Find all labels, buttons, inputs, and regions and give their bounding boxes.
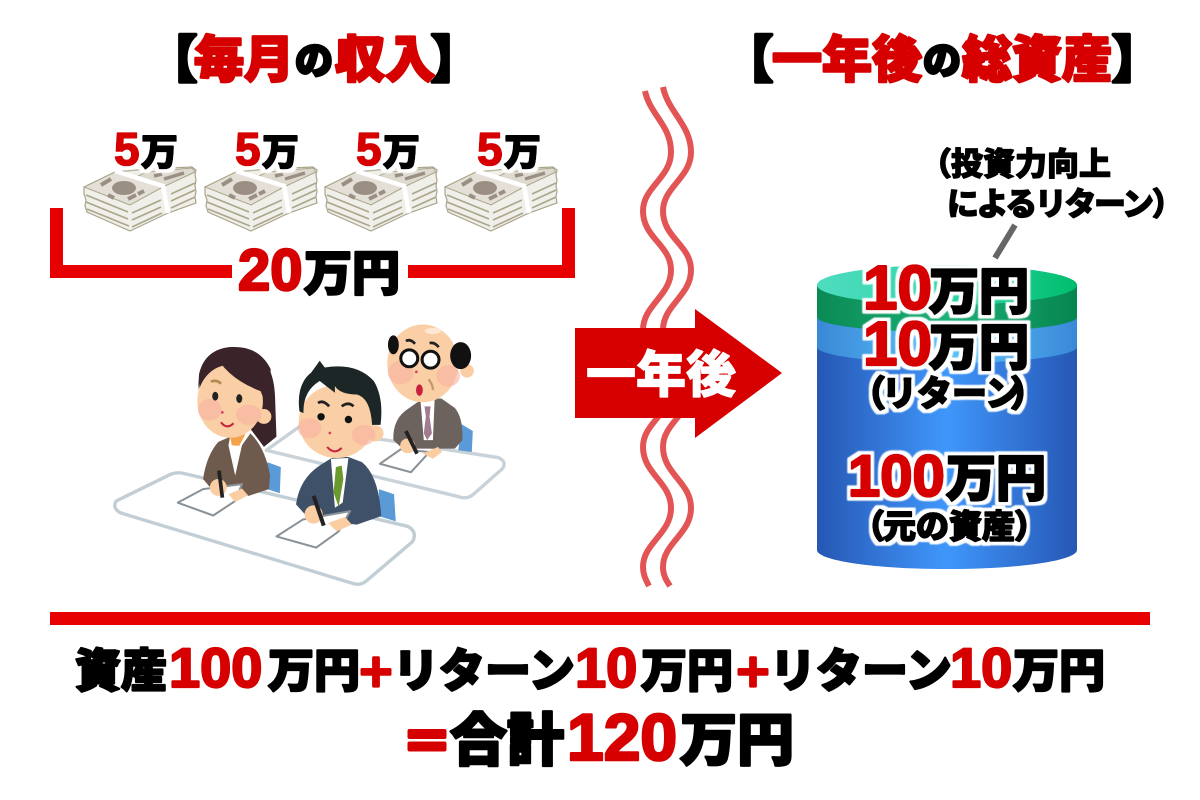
note: return from improved investing (920, 146, 1181, 222)
label: return note: ） (1010, 373, 1046, 414)
label: 5万 x4: 5 (114, 123, 140, 175)
bills stack 3 (325, 167, 437, 231)
heading: monthly income (147, 32, 481, 88)
label: 100万円: 100 (848, 444, 945, 509)
label: 5万 x4: 万 (383, 132, 420, 173)
divider bar (50, 612, 1150, 625)
heading: total assets after one year: 】 (1112, 32, 1162, 88)
formula line 2: total: 合計 (450, 709, 564, 773)
back desk (266, 427, 504, 498)
heading: total assets after one year: 総資産 (962, 32, 1112, 88)
formula line 1: 10 (950, 636, 1012, 699)
heading: total assets after one year: 【 (723, 32, 773, 88)
label: 10万円 top: 10 (863, 254, 932, 323)
arrow: after one year (575, 309, 782, 438)
bracket: sum of income (50, 208, 575, 278)
note: return from improved investing: （ (920, 146, 952, 182)
formula line 1: 10 (575, 636, 637, 699)
note: return from improved investing: によるリターン） (947, 186, 1181, 222)
bills stack 4 (445, 167, 557, 231)
heading: total assets after one year: 一年後 (772, 32, 922, 88)
label: 10万円 return: 10 (863, 310, 932, 379)
formula line 1: 資産 (75, 645, 167, 697)
note: return from improved investing: 投資力向上 (951, 146, 1111, 182)
heading: monthly income: 【 (147, 32, 197, 88)
label: 20万円 (232, 238, 408, 303)
formula line 1: 万円 (641, 645, 733, 697)
heading: total assets after one year (723, 32, 1162, 88)
label: 5万 x4: 5 (477, 123, 503, 175)
leader line (995, 225, 1015, 258)
formula line 1: 万円 (1013, 645, 1105, 697)
cylinder base: original assets (817, 347, 1077, 569)
label: 20万円: 20 (238, 238, 303, 303)
formula line 1: ＋ (733, 652, 773, 696)
label: return note: （ (850, 373, 886, 414)
label: return note: リターン (882, 375, 1020, 414)
formula line 1: 万円 (268, 645, 360, 697)
cylinder chart (817, 265, 1077, 569)
formula line 1: 100 (169, 636, 262, 699)
label: 5万 x4: 万 (262, 132, 299, 173)
label: original assets note: 元の資産 (883, 508, 1015, 545)
heading: monthly income: 収入 (335, 32, 435, 88)
cylinder layer: investment return (817, 285, 1077, 332)
cylinder layer: return (817, 317, 1077, 363)
illustration: people taking notes at desks (115, 325, 504, 584)
heading: monthly income: 毎月 (194, 32, 294, 88)
cylinder top (817, 265, 1077, 305)
bills stack 1 (84, 167, 196, 231)
formula line 1: ＋ (356, 652, 396, 696)
woman (178, 347, 281, 516)
label: original assets note: ） (1014, 508, 1047, 545)
label: 5万 x4: 5 (356, 123, 382, 175)
bills stack 2 (205, 167, 317, 231)
formula line 2: total: 万円 (680, 709, 794, 773)
label: 10万円 return: 万円 (929, 320, 1029, 376)
label: 10万円 top: 万円 (929, 264, 1029, 320)
formula line 1: リターン (770, 645, 952, 697)
label: 20万円: 万円 (304, 248, 400, 301)
label: original assets note: （ (852, 508, 885, 545)
heading: monthly income: 】 (431, 32, 481, 88)
front desk (115, 473, 414, 584)
formula line 1: リターン (393, 645, 575, 697)
man (276, 361, 396, 548)
old man (380, 325, 474, 472)
arrow: after one year: 一年後 (586, 347, 736, 403)
label: 100万円: 万円 (946, 451, 1046, 507)
label: 5万 x4: 5 (235, 123, 261, 175)
heading: monthly income: の (295, 41, 333, 83)
formula line 2: total: 120 (567, 700, 677, 774)
label: 5万 x4 (114, 123, 541, 175)
wavy separator lines (643, 87, 691, 586)
label: 5万 x4: 万 (504, 132, 541, 173)
heading: total assets after one year: の (923, 41, 961, 83)
formula line 2: total: ＝ (402, 715, 452, 771)
label: 5万 x4: 万 (141, 132, 178, 173)
